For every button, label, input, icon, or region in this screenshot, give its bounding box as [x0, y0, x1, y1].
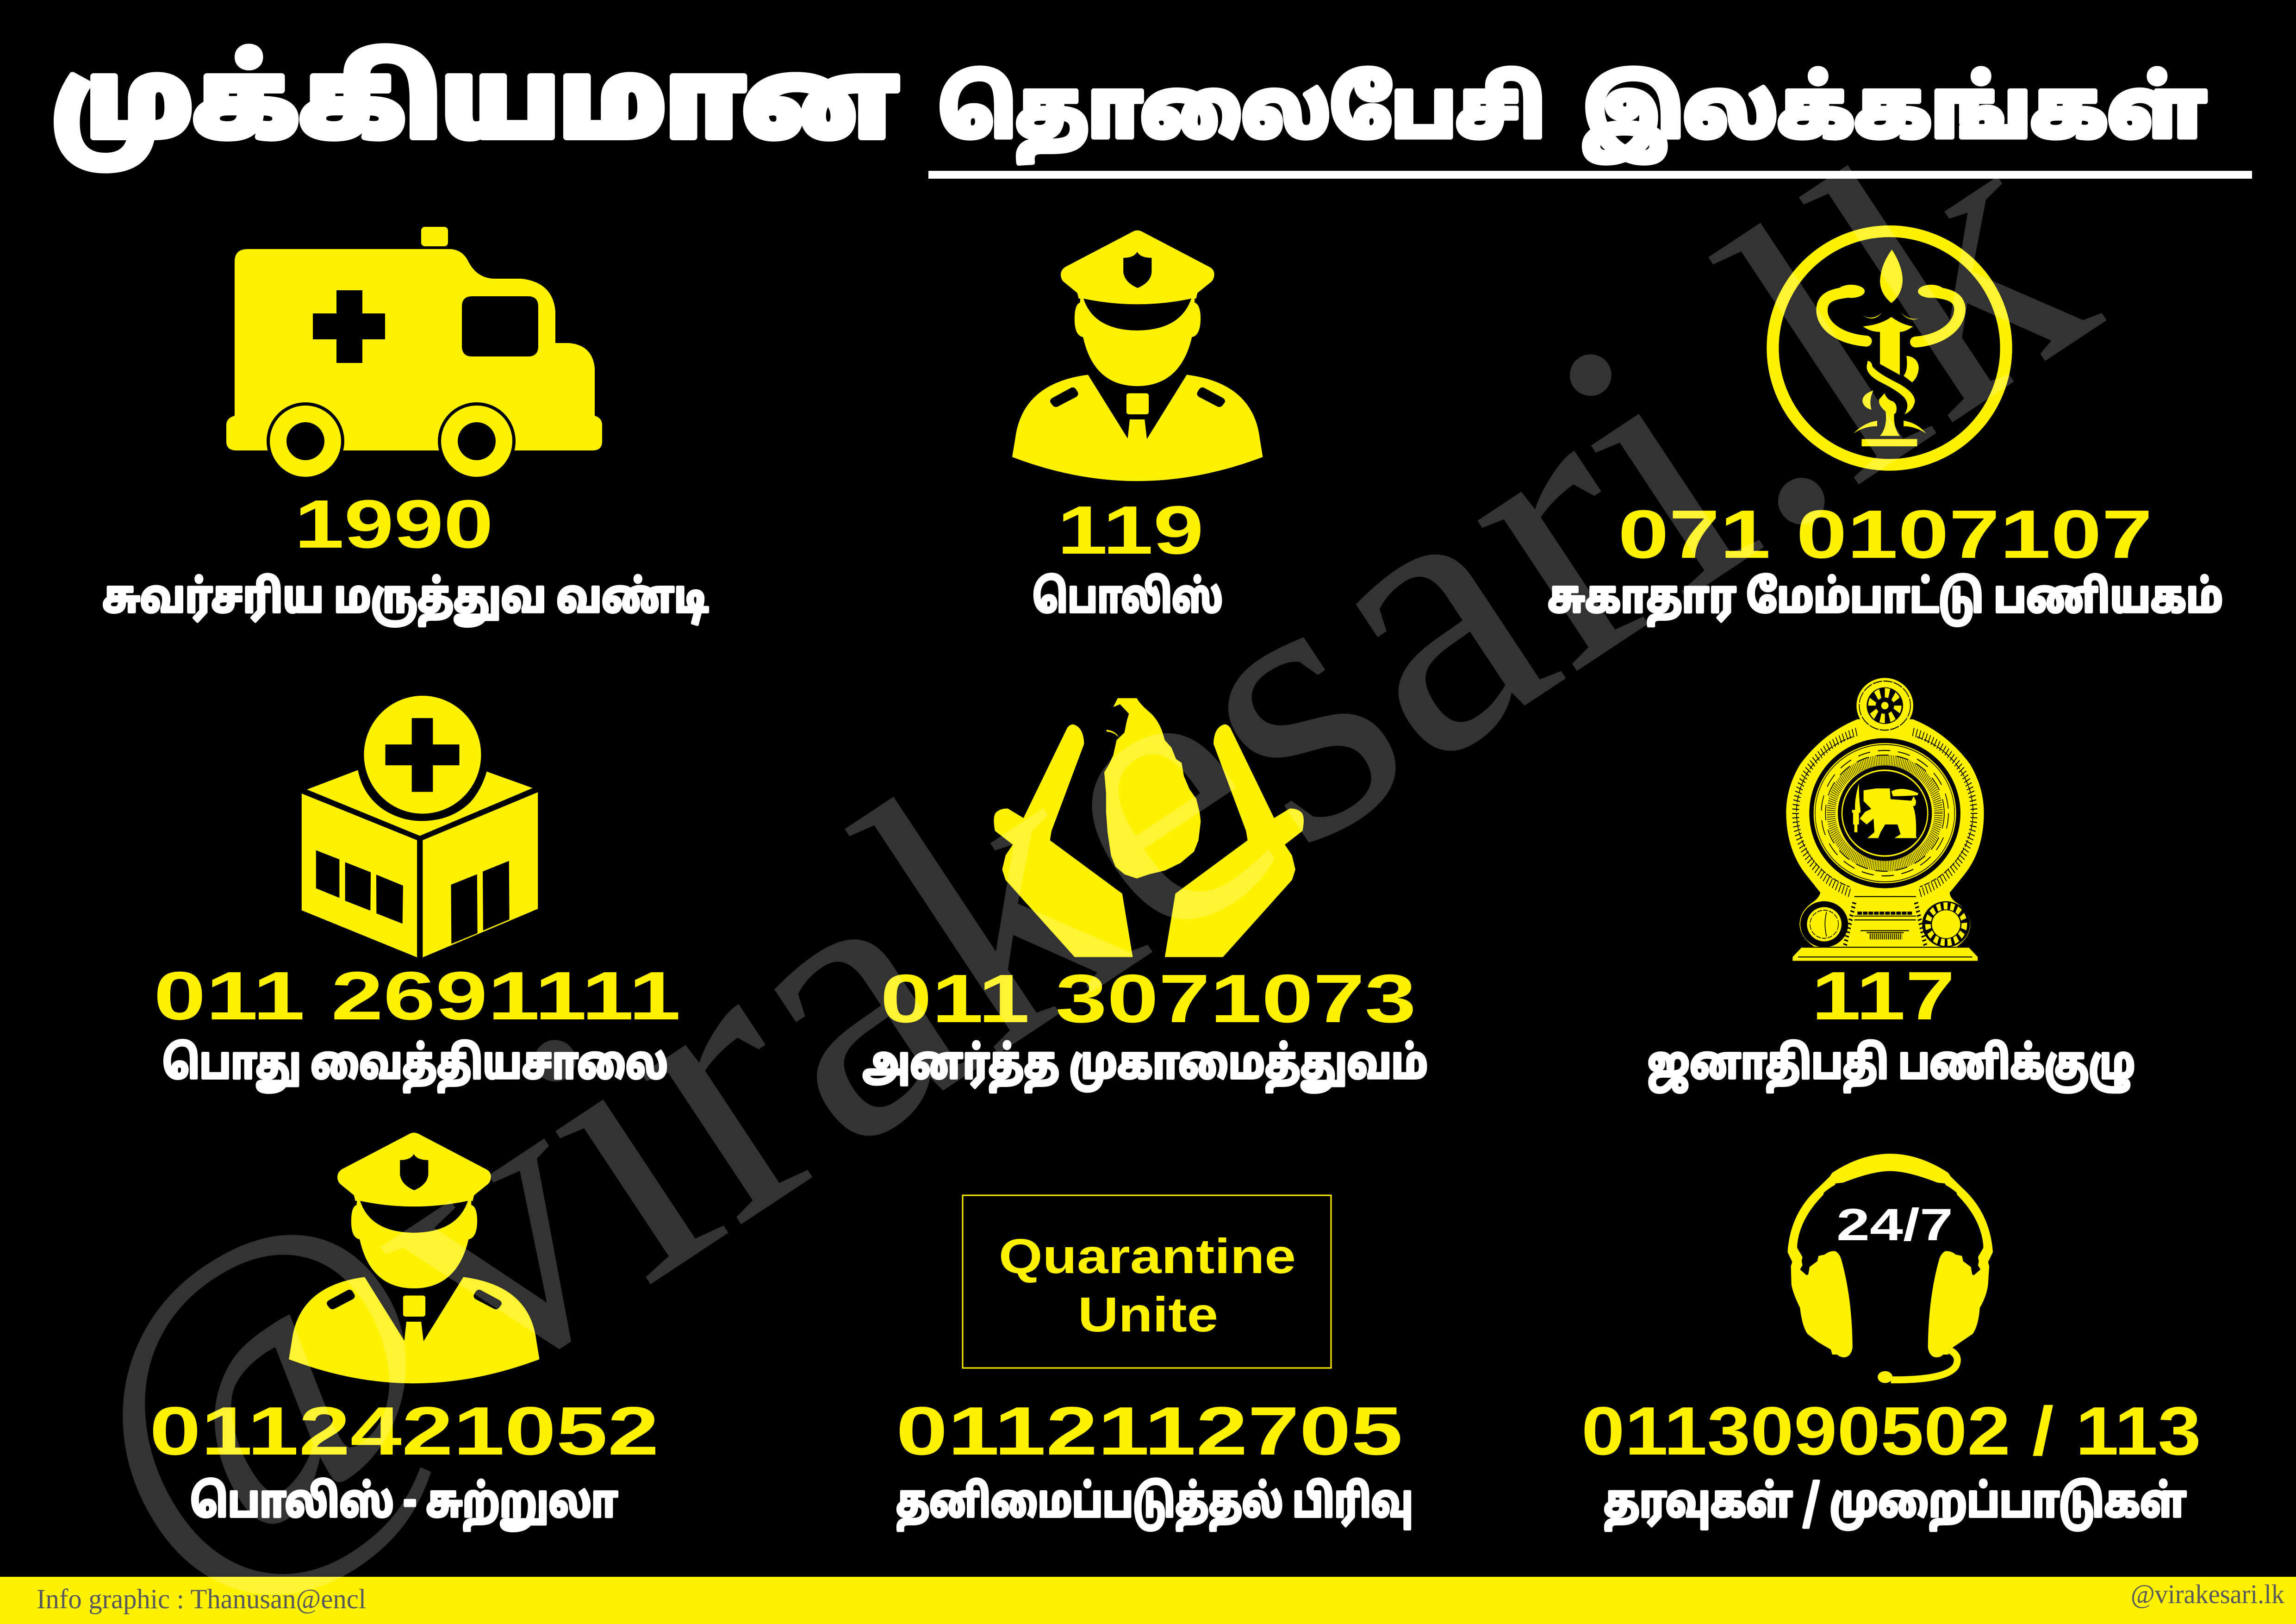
number: 0112421052: 0112421052 [149, 1393, 659, 1469]
icon: caduceus emblem [1773, 231, 2006, 465]
number: 0112112705: 0112112705 [896, 1393, 1403, 1469]
panel: data and complaints [1581, 1154, 2201, 1533]
label: disaster management: அனர்த்த முகாமைத்துவம் [863, 1039, 1428, 1095]
label: presidential task force: ஜனாதிபதி பணிக்குழு [1648, 1039, 2135, 1095]
box: Quarantine Unite [963, 1195, 1331, 1368]
number: 011 3071073: 011 3071073 [880, 961, 1416, 1037]
icon: headset with 24/7 [1787, 1154, 1993, 1383]
box: Quarantine Unite: Quarantine [999, 1229, 1296, 1284]
number: 011 2691111: 011 2691111 [154, 958, 681, 1034]
title: முக்கியமான [52, 45, 899, 177]
icon: police officer [1012, 231, 1263, 481]
panel: police 119 [1012, 231, 1263, 629]
icon: hands holding Sri Lanka [994, 698, 1304, 957]
footer handle: @virakesari.lk [2131, 1579, 2284, 1609]
credit: info graphic: Info graphic : Thanusan@encl [37, 1584, 366, 1614]
panel: general hospital [154, 696, 681, 1095]
panel: tourist police [149, 1133, 659, 1533]
number: 1990: 1990 [294, 486, 493, 562]
icon: hospital building [302, 696, 538, 957]
title [52, 45, 2252, 179]
panel: presidential task force [1648, 678, 2135, 1095]
label: general hospital: பொது வைத்தியசாலை [162, 1039, 668, 1095]
title: தொலைபேசி [939, 67, 1545, 167]
box: Quarantine Unite: Unite [1078, 1287, 1218, 1342]
number: 117: 117 [1811, 958, 1955, 1034]
number: 071 0107107: 071 0107107 [1618, 496, 2153, 573]
label: tourist police: பொலிஸ் - சுற்றுலா [190, 1478, 618, 1533]
panel: quarantine unit [896, 1195, 1413, 1533]
label: ambulance service: சுவர்சரிய மருத்துவ வண்டி [102, 573, 709, 629]
icon: national emblem of Sri Lanka [1786, 678, 1984, 961]
label: quarantine division: தனிமைப்படுத்தல் பிரிவு [896, 1478, 1413, 1533]
footer bar [0, 1577, 2296, 1624]
icon: ambulance [226, 227, 602, 483]
panel: ambulance 1990 [102, 227, 709, 629]
panel: disaster management [863, 698, 1428, 1095]
number: 0113090502 / 113: 0113090502 / 113 [1581, 1393, 2201, 1469]
number: 119: 119 [1057, 492, 1204, 568]
label: health promotion bureau: சுகாதார மேம்பாட்டு பணியகம் [1548, 573, 2223, 629]
label: data and complaints: தரவுகள் / முறைப்பாடுகள் [1604, 1478, 2186, 1533]
icon: headset with 24/7: 24/7 [1836, 1199, 1953, 1250]
title: இலக்கங்கள் [1583, 67, 2207, 167]
panel: health promotion bureau [1548, 231, 2223, 629]
icon: police officer [289, 1133, 540, 1383]
label: police: பொலிஸ் [1033, 573, 1223, 629]
